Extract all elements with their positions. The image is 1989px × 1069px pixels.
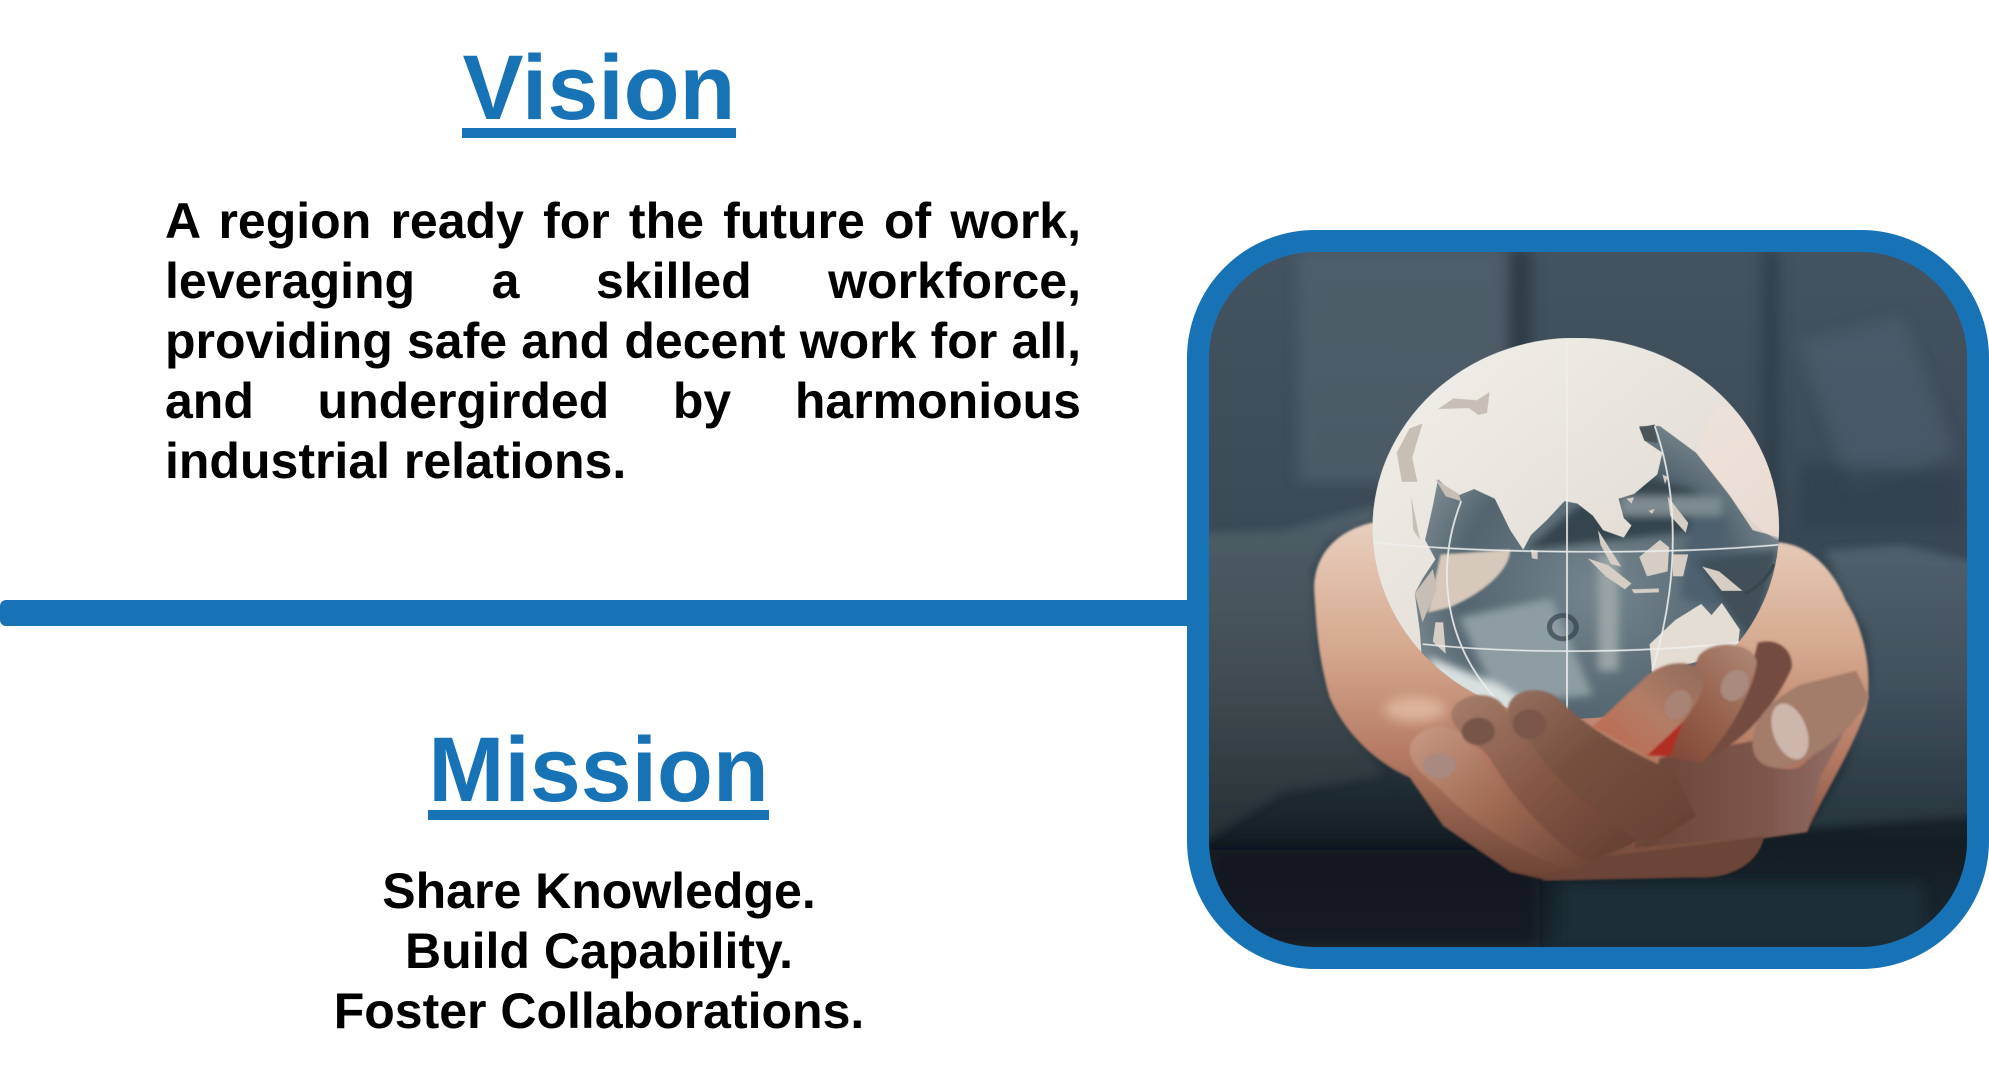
islands <box>1433 474 1742 654</box>
text block: vision statement: A region ready for the future of work, <box>165 193 1081 249</box>
photo frame <box>1198 241 1978 958</box>
text block: mission statements: Foster Collaborations. <box>334 983 864 1039</box>
divider bar <box>0 600 1200 626</box>
left sleeve <box>1201 505 1384 845</box>
text block: mission statements: Share Knowledge. <box>382 863 816 919</box>
lower knuckles <box>1541 837 1763 880</box>
globe grid lines <box>1374 341 1779 710</box>
frosted back-side land <box>1428 550 1510 613</box>
jacket shading <box>1209 249 1964 947</box>
text block: mission statements: Build Capability. <box>405 923 793 979</box>
glass globe <box>1366 331 1789 729</box>
hands base <box>1314 522 1869 880</box>
fingernails <box>1423 665 1816 778</box>
photo area <box>1201 248 1975 950</box>
red shadow between fingers <box>1647 722 1683 756</box>
upper finger <box>1506 689 1694 830</box>
text block: vision statement <box>165 193 1081 489</box>
lowest finger <box>1409 727 1530 850</box>
palm <box>1634 724 1848 848</box>
translucent right edge <box>1696 404 1779 540</box>
land details <box>1397 392 1657 622</box>
middle finger <box>1451 695 1644 862</box>
hand in front: palm and fingers <box>1410 641 1869 880</box>
text block: mission statements <box>334 863 864 1039</box>
upper right fingers <box>1714 640 1793 749</box>
panel: framed photo of hands holding a glass globe <box>1187 230 1989 969</box>
frosted land upper globe <box>1372 338 1780 652</box>
heading: Mission: Mission <box>428 719 769 821</box>
bright rim of light on palm <box>1384 697 1446 722</box>
Australia <box>1650 603 1740 673</box>
text block: vision statement: and undergirded by harmonious <box>165 373 1081 429</box>
heading: Vision: Vision <box>463 37 735 139</box>
right sleeve <box>1807 545 1975 828</box>
text block: vision statement: providing safe and decent work for all, <box>165 313 1081 369</box>
thumb <box>1752 671 1869 768</box>
text block: vision statement: industrial relations. <box>165 433 626 489</box>
text block: vision statement: leveraging a skilled workforce, <box>165 253 1081 309</box>
see-through shading <box>1428 472 1779 719</box>
